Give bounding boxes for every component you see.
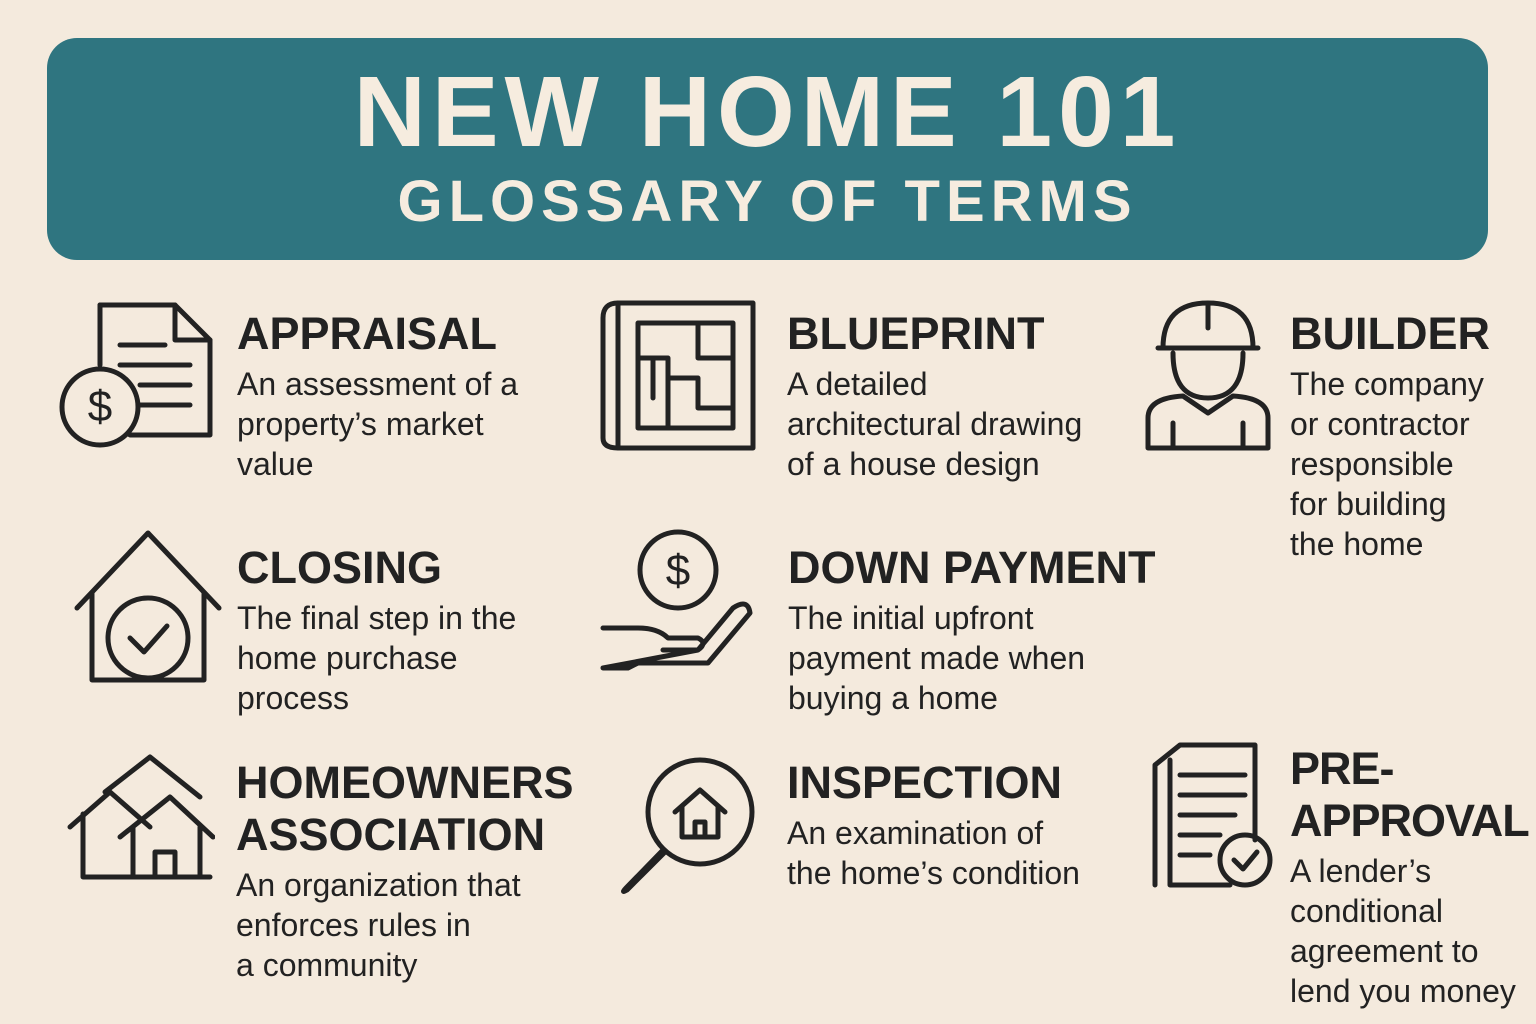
item: builder: The company xyxy=(1290,366,1484,402)
icon: builder xyxy=(1146,300,1270,450)
item: inspection xyxy=(787,757,1080,891)
item: builder: BUILDER xyxy=(1290,308,1490,359)
icon: blueprint xyxy=(600,300,756,450)
item: inspection: the home’s condition xyxy=(787,855,1080,891)
item: pre-approval: A lender’s xyxy=(1290,853,1431,889)
item: closing xyxy=(237,542,516,716)
item: closing: The final step in the xyxy=(237,600,516,636)
item: inspection: An examination of xyxy=(787,815,1043,851)
item: builder xyxy=(1290,308,1490,562)
banner xyxy=(47,38,1488,260)
item: blueprint: A detailed xyxy=(787,366,928,402)
item: HOA: a community xyxy=(236,947,417,983)
icon: closing xyxy=(74,530,222,682)
item: blueprint: BLUEPRINT xyxy=(787,308,1044,359)
item: HOA xyxy=(236,757,574,983)
item: pre-approval: agreement to xyxy=(1290,933,1479,969)
item: down payment xyxy=(788,542,1156,716)
icon: appraisal: $ xyxy=(88,382,112,431)
icon: pre-approval xyxy=(1152,742,1272,888)
item: appraisal: An assessment of a xyxy=(237,366,518,402)
icon: HOA xyxy=(68,754,215,880)
item: appraisal: APPRAISAL xyxy=(237,308,497,359)
item: HOA: enforces rules in xyxy=(236,907,471,943)
item: pre-approval xyxy=(1290,743,1529,1009)
item: pre-approval: APPROVAL xyxy=(1290,795,1529,846)
icon: inspection xyxy=(621,758,754,894)
item: pre-approval: lend you money xyxy=(1290,973,1516,1009)
item: closing: CLOSING xyxy=(237,542,442,593)
item: appraisal: property’s market xyxy=(237,406,484,442)
item: builder: for building xyxy=(1290,486,1447,522)
item: appraisal: value xyxy=(237,446,314,482)
title: NEW HOME 101 xyxy=(354,56,1181,168)
item: blueprint xyxy=(787,308,1082,482)
item: builder: responsible xyxy=(1290,446,1454,482)
item: closing: home purchase xyxy=(237,640,458,676)
item: pre-approval: PRE- xyxy=(1290,743,1394,794)
subtitle: GLOSSARY OF TERMS xyxy=(397,169,1138,234)
icon: down payment xyxy=(600,530,752,670)
item: closing: process xyxy=(237,680,349,716)
item: down payment: The initial upfront xyxy=(788,600,1033,636)
item: blueprint: architectural drawing xyxy=(787,406,1082,442)
item: down payment: buying a home xyxy=(788,680,998,716)
item: down payment: payment made when xyxy=(788,640,1085,676)
item: pre-approval: conditional xyxy=(1290,893,1443,929)
item: builder: or contractor xyxy=(1290,406,1470,442)
item: HOA: ASSOCIATION xyxy=(236,809,545,860)
item: inspection: INSPECTION xyxy=(787,757,1062,808)
icon: appraisal xyxy=(60,302,212,448)
item: down payment: DOWN PAYMENT xyxy=(788,542,1156,593)
item: appraisal xyxy=(237,308,518,482)
item: HOA: An organization that xyxy=(236,867,521,903)
item: builder: the home xyxy=(1290,526,1423,562)
item: HOA: HOMEOWNERS xyxy=(236,757,574,808)
item: blueprint: of a house design xyxy=(787,446,1040,482)
icon: down payment: $ xyxy=(666,546,690,595)
